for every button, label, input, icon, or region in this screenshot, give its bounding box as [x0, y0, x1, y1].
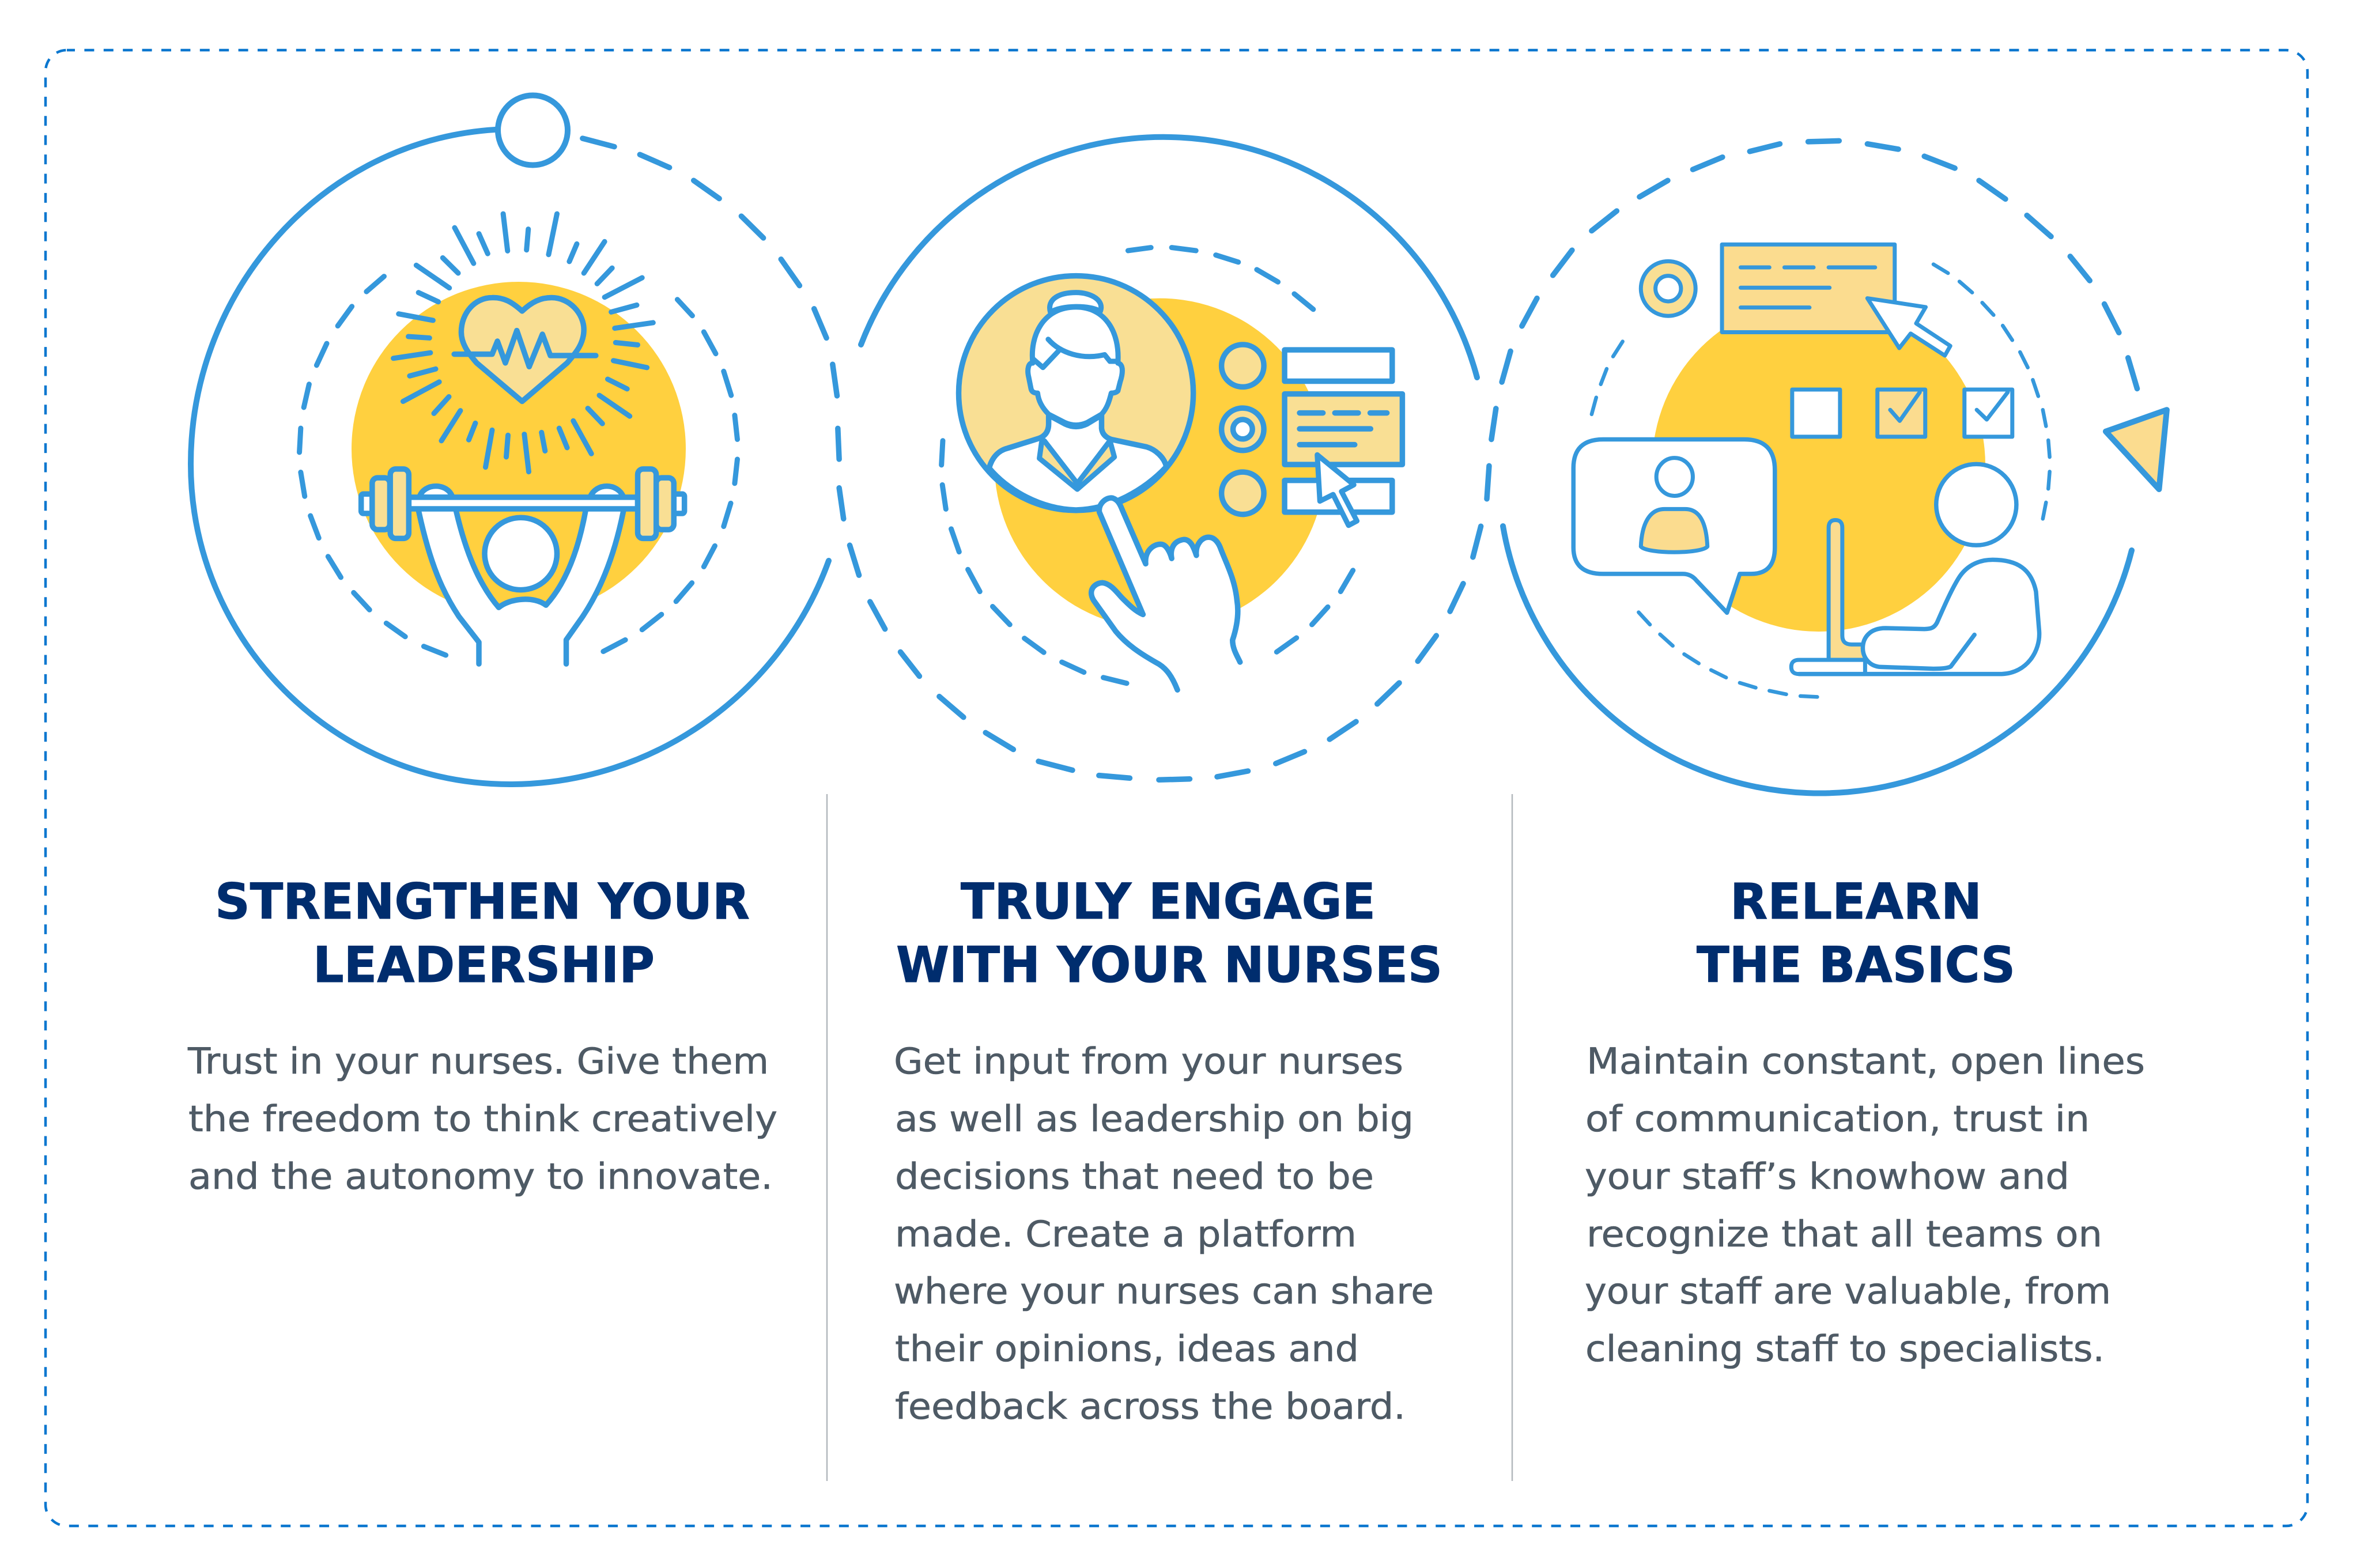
- heading 1: STRENGTHEN YOUR: [215, 873, 750, 931]
- figure artwork: [300, 138, 837, 664]
- nurse artwork: [838, 248, 1481, 780]
- body text 2: where your nurses can share: [894, 1270, 1434, 1312]
- cursor: [1867, 299, 1950, 356]
- right weights: [638, 469, 685, 538]
- desk: [1791, 660, 1865, 674]
- cursor: [1317, 455, 1357, 526]
- left weights: [361, 469, 409, 538]
- ring node circle: [498, 96, 568, 165]
- outer dashed arc 3: [1487, 141, 2137, 499]
- icon: weightlifter with heart: [191, 96, 837, 784]
- body text 1: the freedom to think creatively: [188, 1098, 777, 1140]
- inner dashed ring 3: [1592, 265, 2050, 697]
- nurse head: [1028, 307, 1122, 425]
- heading 2: WITH YOUR NURSES: [896, 936, 1442, 994]
- form field top: [1285, 350, 1392, 381]
- yellow disc 1: [352, 282, 686, 616]
- body text 2: feedback across the board.: [895, 1385, 1406, 1427]
- head: [485, 517, 557, 590]
- inner dashed ring 2: [942, 248, 1353, 683]
- yellow disc 3: [1652, 299, 1985, 632]
- heading 1: LEADERSHIP: [313, 936, 655, 994]
- speech bubble: [1573, 439, 1775, 613]
- checkboxes: [1792, 390, 2012, 437]
- arrowhead triangle: [2106, 410, 2167, 489]
- hand fill: [1091, 498, 1240, 690]
- radiating rays: [394, 214, 653, 472]
- form field bottom: [1285, 481, 1392, 512]
- body text 2: made. Create a platform: [895, 1213, 1357, 1255]
- target icon: [1641, 261, 1695, 316]
- body text 3: your staff are valuable, from: [1585, 1270, 2111, 1312]
- body text 3: [1585, 1040, 2145, 1370]
- body text 1: Trust in your nurses. Give them: [187, 1040, 769, 1082]
- inner dashed ring 1: [300, 277, 737, 655]
- yellow disc 2: [995, 299, 1325, 629]
- body text 3: your staff’s knowhow and: [1585, 1155, 2069, 1197]
- solid ring arc 2: [861, 137, 1477, 377]
- panel: strengthen your leadership: [187, 96, 837, 1197]
- nurse bun: [1050, 293, 1101, 312]
- body text 1: [187, 1040, 777, 1197]
- body text 2: Get input from your nurses: [894, 1040, 1403, 1082]
- body fill: [418, 510, 624, 664]
- heading 2: TRULY ENGAGE: [961, 873, 1376, 931]
- icon: nurse portrait with hand and form: [838, 137, 1481, 780]
- arms and shoulders: [418, 510, 624, 664]
- heading 1: [215, 873, 750, 994]
- body text 2: their opinions, ideas and: [895, 1328, 1359, 1370]
- body text 3: Maintain constant, open lines: [1587, 1040, 2145, 1082]
- portrait disc: [959, 276, 1194, 511]
- heading 3: [1697, 873, 2015, 994]
- nurse shoulders: [989, 415, 1166, 510]
- body text 3: of communication, trust in: [1585, 1098, 2090, 1140]
- icon: staff at computer with chat bubble and checklist: [1487, 141, 2167, 794]
- body text 1: and the autonomy to innovate.: [188, 1155, 773, 1197]
- collar: [1040, 441, 1115, 489]
- message card: [1722, 244, 1895, 333]
- body text 2: as well as leadership on big: [895, 1098, 1414, 1140]
- heading 2: [896, 873, 1442, 994]
- computer stand: [1829, 520, 1865, 660]
- panel: truly engage with your nurses: [838, 137, 1481, 1427]
- hair line: [1033, 339, 1116, 368]
- staff artwork: [1487, 141, 2167, 697]
- heading 3: THE BASICS: [1697, 936, 2015, 994]
- heading 3: RELEARN: [1730, 873, 1982, 931]
- body text 2: [894, 1040, 1434, 1427]
- body text 3: recognize that all teams on: [1587, 1213, 2102, 1255]
- heart: [461, 297, 584, 402]
- outer dashed arc 1: [583, 138, 837, 396]
- solid ring arc 1: [191, 130, 829, 784]
- panel: relearn the basics: [1487, 141, 2167, 1370]
- outer dashed arc 2: [838, 428, 1481, 780]
- heartbeat line: [454, 331, 596, 367]
- body text 3: cleaning staff to specialists.: [1585, 1328, 2105, 1370]
- pointing hand outline: [1091, 498, 1240, 690]
- worker body: [1863, 560, 2039, 673]
- body text 2: decisions that need to be: [895, 1155, 1374, 1197]
- bubble avatar: [1641, 458, 1708, 552]
- column divider left: [826, 794, 828, 1481]
- solid ring arc 3: [1503, 526, 2132, 794]
- worker outline: [1799, 560, 2039, 674]
- bar: [409, 497, 638, 509]
- form field selected: [1285, 394, 1402, 464]
- form field text lines: [1300, 413, 1387, 445]
- radio buttons: [1222, 345, 1264, 515]
- worker head: [1936, 464, 2016, 545]
- column divider right: [1512, 794, 1513, 1481]
- message card lines: [1740, 267, 1875, 308]
- hands: [420, 486, 624, 497]
